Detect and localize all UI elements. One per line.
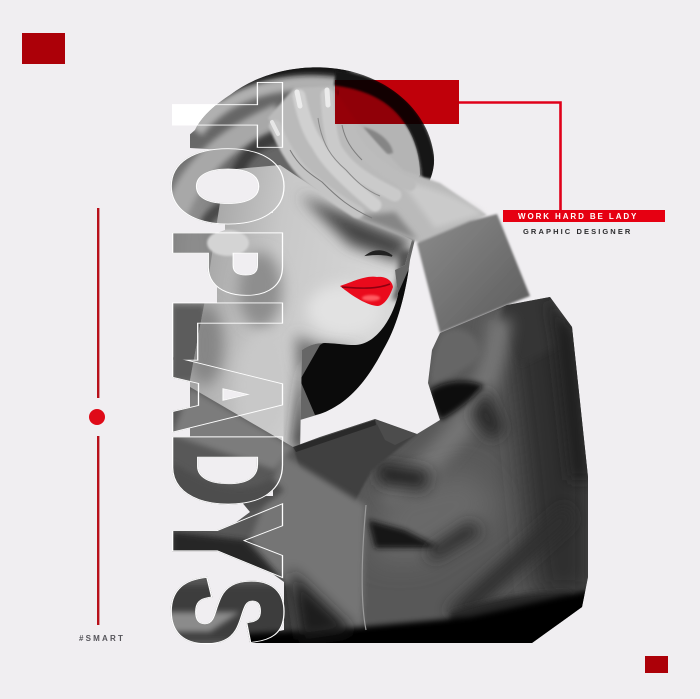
red dot [89, 409, 105, 425]
ear [207, 230, 249, 256]
title outline [170, 82, 285, 643]
hashtag label: #SMART [79, 634, 125, 643]
forehead [338, 86, 420, 177]
photo: woman in dark blouse [160, 55, 595, 650]
blouse body and sleeve [165, 285, 595, 650]
connector line from block to tagline [459, 102, 560, 212]
vertical line upper [97, 208, 99, 398]
lips [340, 277, 393, 306]
nose shadow [367, 251, 392, 256]
tagline bar [503, 210, 665, 222]
sleeve cuff [417, 214, 530, 333]
red block over hair [335, 80, 459, 124]
eye contour behind hand [363, 127, 393, 155]
title: white letter fill: TOPLADYS [145, 84, 310, 645]
hair [170, 67, 434, 420]
subtitle: GRAPHIC DESIGNER [523, 227, 632, 236]
tagline text: WORK HARD BE LADY [518, 212, 638, 221]
face and neck [190, 165, 412, 447]
hand and fingers [268, 86, 487, 243]
red square top left [22, 33, 65, 64]
vertical line lower [97, 436, 99, 625]
red square bottom right [645, 656, 668, 673]
